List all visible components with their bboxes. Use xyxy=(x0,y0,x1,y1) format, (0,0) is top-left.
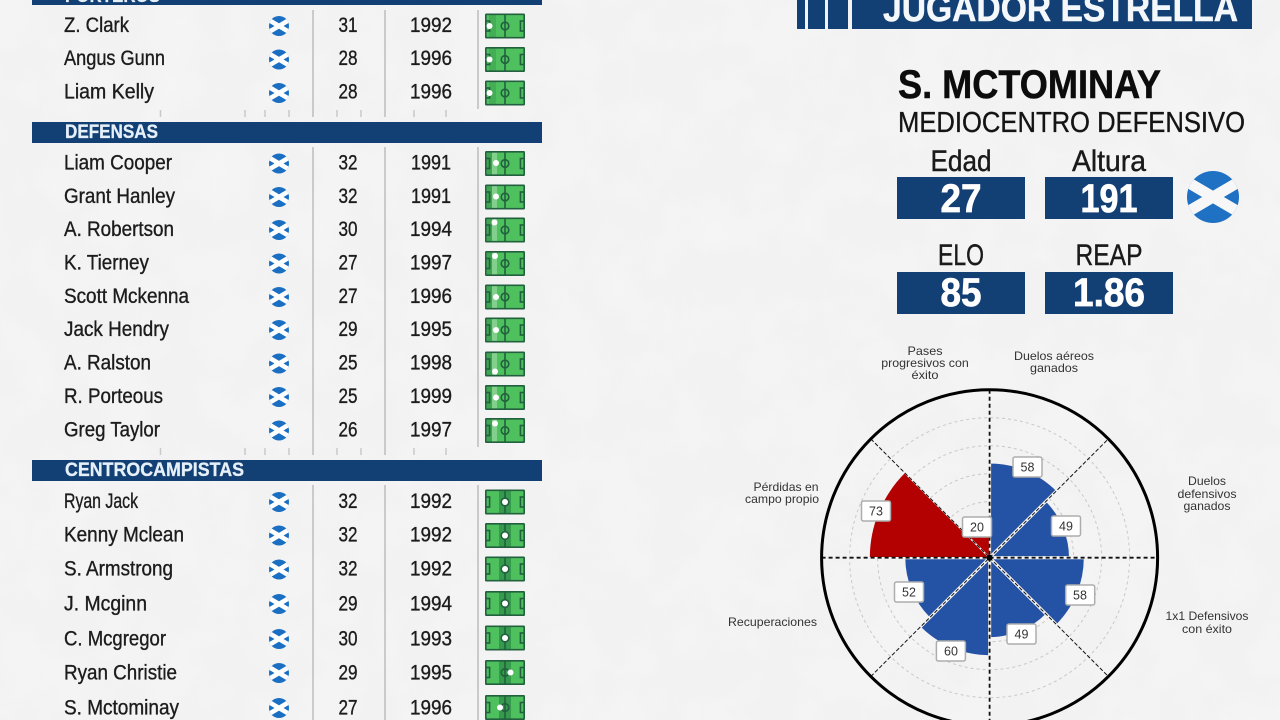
player row: Liam Cooper xyxy=(64,151,525,176)
player row: Jack Hendry: Jack Hendry xyxy=(64,318,169,341)
category labels: progresivos con xyxy=(881,356,969,370)
player row: J. Mcginn xyxy=(64,591,525,616)
value labels: 58 xyxy=(1073,588,1087,602)
category labels: 1x1 Defensivos xyxy=(1166,609,1248,623)
player row: Liam Kelly xyxy=(64,80,525,106)
player row: S. Mctominay: 1996 xyxy=(410,696,452,720)
stat: edad: Edad xyxy=(930,145,992,178)
stat: reap: REAP xyxy=(1076,239,1142,272)
player row: Jack Hendry: 29 xyxy=(338,318,358,341)
value labels: 49 xyxy=(1015,628,1028,642)
player row: Kenny Mclean xyxy=(64,523,525,548)
category labels: ganados xyxy=(1184,499,1230,513)
column separators: centrocampistas xyxy=(313,485,478,720)
player row: Ryan Jack: Ryan Jack xyxy=(64,490,138,513)
stat: altura: 191 xyxy=(1080,177,1138,221)
player row: R. Porteous: 1999 xyxy=(410,385,452,408)
outer circle xyxy=(822,390,1158,720)
player row: Greg Taylor: Greg Taylor xyxy=(64,418,160,442)
category labels: campo propio xyxy=(745,492,819,506)
heading: defensas xyxy=(32,122,542,143)
player row: J. Mcginn: 29 xyxy=(338,592,358,616)
player row: K. Tierney: 1997 xyxy=(410,252,452,274)
player row: Kenny Mclean: Kenny Mclean xyxy=(64,524,184,546)
player row: J. Mcginn: J. Mcginn xyxy=(64,592,147,616)
value labels: 20 xyxy=(970,520,984,534)
player row: R. Porteous xyxy=(64,385,525,410)
dashed range rings xyxy=(850,418,1130,698)
player row: Grant Hanley: 32 xyxy=(338,185,358,208)
player row: Liam Kelly: 1996 xyxy=(410,80,452,104)
player row: C. Mcgregor xyxy=(64,626,525,650)
column separators: porteros xyxy=(160,10,478,117)
player row: Z. Clark xyxy=(64,14,525,38)
player row: A. Robertson: 30 xyxy=(338,218,358,241)
player position: MEDIOCENTRO DEFENSIVO xyxy=(898,107,1245,139)
player row: A. Robertson xyxy=(64,218,525,242)
player row: J. Mcginn: 1994 xyxy=(410,592,452,616)
player row: S. Mctominay: 27 xyxy=(338,696,358,720)
blue wedges xyxy=(904,462,1085,657)
category labels: ganados xyxy=(1030,361,1078,375)
category labels: con éxito xyxy=(1182,622,1232,636)
radial dividers xyxy=(822,390,1158,720)
player row: Jack Hendry: 1995 xyxy=(410,318,452,341)
stat: edad: 27 xyxy=(940,177,982,221)
stat: elo: ELO xyxy=(938,239,984,272)
category labels: Duelos aéreos xyxy=(1014,349,1094,363)
player row: Liam Cooper: Liam Cooper xyxy=(64,152,172,174)
red wedges xyxy=(869,472,990,558)
heading: centrocampistas: CENTROCAMPISTAS xyxy=(65,460,244,481)
stat: reap: 1.86 xyxy=(1073,271,1145,315)
player row: A. Ralston xyxy=(64,352,525,376)
panel: jugador estrella xyxy=(728,0,1252,720)
player row: Ryan Christie: 29 xyxy=(338,662,358,684)
player row: A. Ralston: 25 xyxy=(338,352,358,374)
player row: Z. Clark: 1992 xyxy=(410,14,452,37)
category labels: Pases xyxy=(908,344,942,358)
player row: C. Mcgregor: 30 xyxy=(338,628,358,650)
player row: Ryan Christie xyxy=(64,660,525,685)
column separators: defensas xyxy=(160,147,478,455)
player row: Ryan Christie: 1995 xyxy=(410,662,452,684)
player row: Greg Taylor: 26 xyxy=(338,418,358,442)
player row: Kenny Mclean: 32 xyxy=(338,524,358,546)
player row: S. Armstrong: 1992 xyxy=(410,558,452,580)
player row: Grant Hanley: Grant Hanley xyxy=(64,185,175,208)
player row: Z. Clark: Z. Clark xyxy=(64,14,129,37)
player row: Greg Taylor xyxy=(64,418,525,443)
player row: Angus Gunn: 1996 xyxy=(410,47,452,70)
category labels: Recuperaciones xyxy=(728,615,817,629)
value labels: 49 xyxy=(1059,520,1073,534)
value labels xyxy=(862,457,1095,661)
player row: Ryan Jack xyxy=(64,490,525,514)
player row: K. Tierney: K. Tierney xyxy=(64,252,149,274)
player row: K. Tierney: 27 xyxy=(338,252,358,274)
player row: S. Armstrong: 32 xyxy=(338,558,358,580)
player row: S. Mctominay: S. Mctominay xyxy=(64,696,179,720)
category labels xyxy=(728,344,1248,636)
category labels: éxito xyxy=(912,368,939,382)
player row: K. Tierney xyxy=(64,251,525,276)
category labels: defensivos xyxy=(1178,487,1236,501)
player row: Ryan Christie: Ryan Christie xyxy=(64,662,177,684)
player row: A. Robertson: A. Robertson xyxy=(64,218,174,241)
player row: Grant Hanley: 1991 xyxy=(411,185,451,208)
stat: elo: 85 xyxy=(940,271,982,315)
player row: Scott Mckenna: Scott Mckenna xyxy=(64,285,189,308)
value labels: 73 xyxy=(869,504,883,518)
player row: R. Porteous: R. Porteous xyxy=(64,385,163,408)
player row: Scott Mckenna: 27 xyxy=(338,285,358,308)
player row: A. Ralston: 1998 xyxy=(410,352,452,374)
player row: Jack Hendry xyxy=(64,318,525,342)
player row: Angus Gunn: 28 xyxy=(338,47,358,70)
category labels: Pérdidas en xyxy=(754,480,818,494)
player row: Liam Cooper: 32 xyxy=(338,152,358,174)
player row: S. Mctominay xyxy=(64,695,525,720)
player row: Scott Mckenna xyxy=(64,284,525,310)
stat: edad xyxy=(897,145,1025,221)
player name: S. MCTOMINAY xyxy=(898,63,1161,107)
value labels: 60 xyxy=(944,644,958,658)
panel: squad table xyxy=(32,0,542,720)
player row: Ryan Jack: 32 xyxy=(338,490,358,513)
player row: A. Robertson: 1994 xyxy=(410,218,452,241)
player row: Liam Cooper: 1991 xyxy=(411,152,451,174)
player row: Z. Clark: 31 xyxy=(338,14,358,37)
player row: Kenny Mclean: 1992 xyxy=(410,524,452,546)
stat: elo xyxy=(897,239,1025,315)
heading: defensas: DEFENSAS xyxy=(65,122,158,143)
player row: Scott Mckenna: 1996 xyxy=(410,285,452,308)
category labels: Duelos xyxy=(1188,474,1226,488)
player row: A. Ralston: A. Ralston xyxy=(64,352,151,374)
stat: altura: Altura xyxy=(1072,145,1146,178)
player row: S. Armstrong xyxy=(64,556,525,582)
player row: Angus Gunn: Angus Gunn xyxy=(64,47,165,70)
player row: Liam Kelly: 28 xyxy=(338,80,358,104)
centre dot xyxy=(987,555,993,561)
player row: Ryan Jack: 1992 xyxy=(410,490,452,513)
player row: R. Porteous: 25 xyxy=(338,385,358,408)
player row: S. Armstrong: S. Armstrong xyxy=(64,558,173,580)
player row: C. Mcgregor: C. Mcgregor xyxy=(64,628,166,650)
stat: altura xyxy=(1045,145,1173,221)
player row: C. Mcgregor: 1993 xyxy=(410,628,452,650)
player row: Grant Hanley xyxy=(64,184,525,210)
player row: Angus Gunn xyxy=(64,47,525,72)
heading: porteros xyxy=(32,0,542,7)
value labels: 52 xyxy=(902,586,916,600)
player row: Liam Kelly: Liam Kelly xyxy=(64,80,154,104)
stat: reap xyxy=(1045,239,1173,315)
value labels: 58 xyxy=(1021,460,1034,474)
polar chart xyxy=(728,344,1248,720)
player row: Greg Taylor: 1997 xyxy=(410,418,452,442)
icon: scottish flag xyxy=(1187,171,1239,223)
heading: centrocampistas xyxy=(32,460,542,481)
